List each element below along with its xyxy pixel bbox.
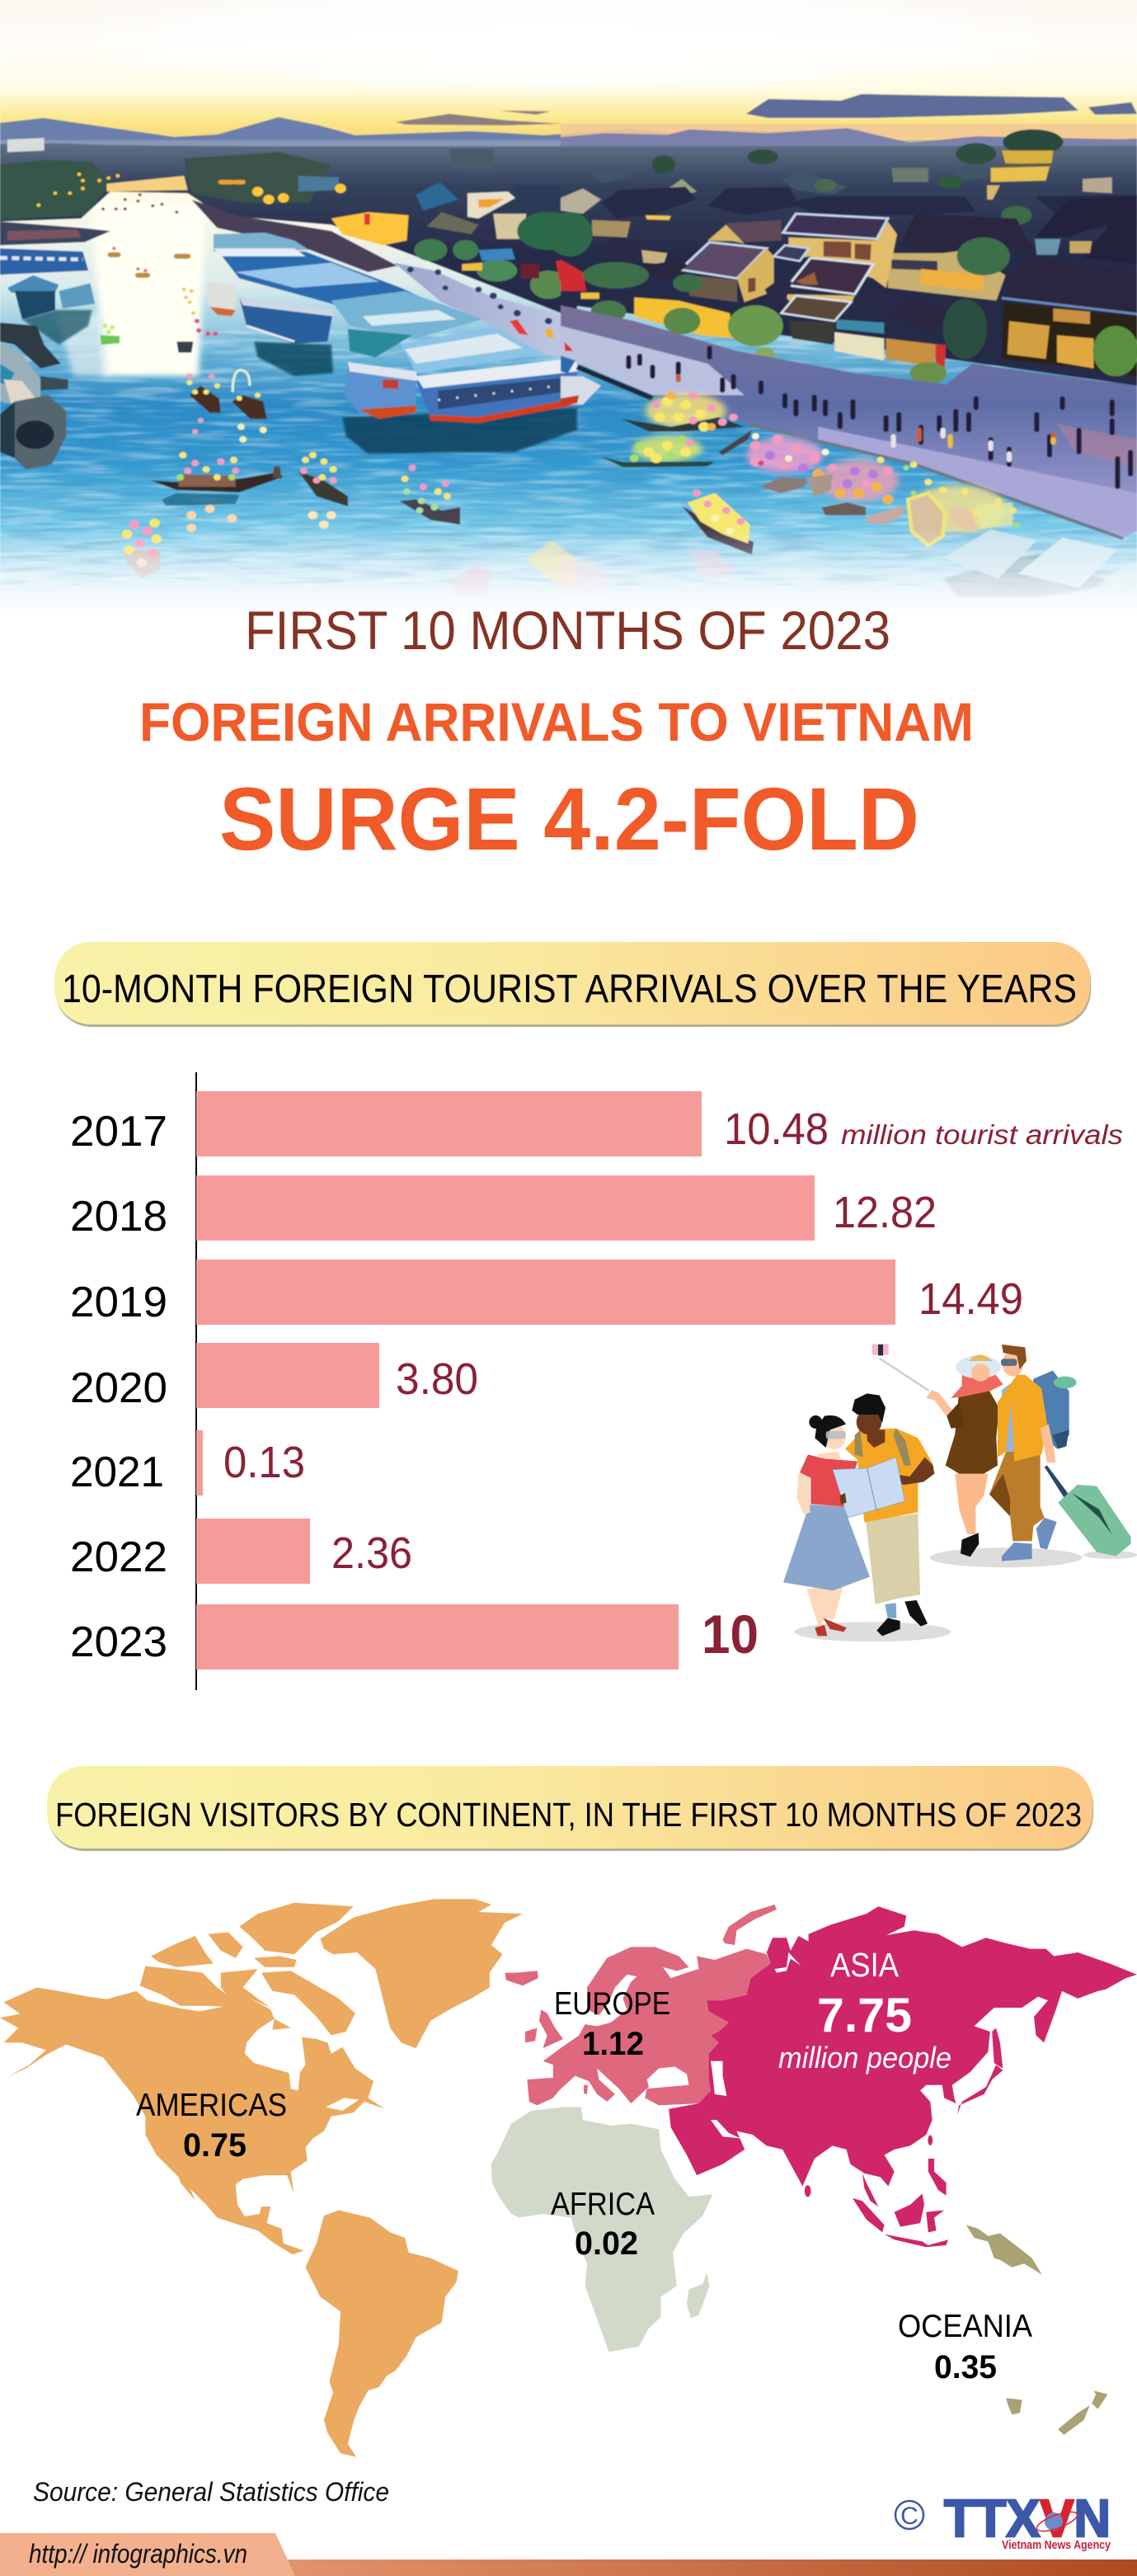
bar 2018 [70, 1175, 937, 1241]
bar 2022 [70, 1519, 412, 1584]
label: Europe [554, 1986, 670, 2062]
right half of photo [547, 124, 1137, 597]
bank crowd strip [191, 200, 397, 272]
label: Oceania: OCEANIA [898, 2309, 1032, 2344]
trees near bank [414, 212, 580, 299]
label: Africa [551, 2187, 655, 2262]
river water with ripples [0, 190, 1137, 627]
selfie couple [872, 1344, 1131, 1561]
label: Oceania: 0.35 [934, 2349, 997, 2385]
logo: TTXVN Vietnam News Agency: C [900, 2503, 919, 2530]
bar 2017 [70, 1091, 1123, 1156]
people on bank [407, 266, 573, 324]
heading: first 10 months of 2023: FIRST 10 MONTHS OF 2023 [245, 600, 890, 661]
map: Asia [669, 1906, 1137, 2247]
heading: surge 4.2-fold: SURGE 4.2-FOLD [219, 769, 919, 869]
bar 2023: 2023 [70, 1618, 167, 1666]
photo: Hoi An riverside at dusk [0, 0, 1137, 631]
crowd [628, 348, 1130, 487]
label: Asia: ASIA [830, 1946, 900, 1984]
section banner: visitors by continent [47, 1766, 1093, 1851]
label: Asia: 7.75 [817, 1989, 912, 2042]
map: Americas [0, 1899, 538, 2457]
lantern boat: twin boats mid river [190, 386, 221, 412]
logo: TTXVN Vietnam News Agency: Vietnam News Agency [1002, 2538, 1111, 2552]
bar 2017: million tourist arrivals [841, 1119, 1123, 1150]
bar 2023 [70, 1604, 759, 1669]
label: Americas [136, 2088, 287, 2164]
trees [547, 212, 1137, 407]
label: Asia: million people [778, 2041, 951, 2074]
houses [561, 196, 1137, 376]
footer bar [0, 2533, 1137, 2576]
bar 2020: 2020 [70, 1364, 167, 1412]
bar 2019: 14.49 [919, 1274, 1023, 1324]
bar 2021: 2021 [70, 1448, 164, 1496]
far town [0, 144, 577, 319]
bar 2022: 2.36 [331, 1528, 412, 1578]
small far boats [103, 195, 188, 275]
roof field [561, 146, 1137, 386]
label: Africa: AFRICA [551, 2187, 655, 2222]
bar 2021 [70, 1430, 305, 1496]
map: Oceania [966, 2225, 1108, 2435]
map: Europe [525, 1905, 777, 2105]
boat with green lanterns [399, 499, 460, 525]
lantern clusters [622, 417, 745, 431]
bar 2020: 3.80 [396, 1354, 478, 1404]
label: Europe: 1.12 [582, 2026, 644, 2062]
label: Asia [778, 1946, 951, 2074]
label: Americas: AMERICAS [136, 2088, 287, 2123]
bar 2021: 0.13 [223, 1438, 305, 1487]
label: Europe: EUROPE [554, 1986, 670, 2022]
map: Africa [491, 2107, 712, 2352]
round lantern boat [298, 471, 348, 506]
boats in front [759, 478, 807, 493]
bar 2018: 12.82 [833, 1188, 937, 1237]
source note: Source: General Statistics Office [33, 2477, 389, 2507]
fade to white [0, 528, 1137, 631]
bar 2017: 10.48 [724, 1104, 829, 1154]
bar 2018: 2018 [70, 1193, 167, 1241]
upper right lit building [1003, 130, 1063, 155]
promenade left part [394, 262, 577, 360]
left half of photo [0, 138, 580, 597]
section banner: arrivals over the years [54, 942, 1091, 1027]
bar 2020 [70, 1343, 478, 1412]
label: Americas: 0.75 [183, 2127, 247, 2164]
bar 2019: 2019 [70, 1279, 167, 1326]
bar chart: 10-month arrivals by year [70, 1072, 1123, 1690]
moored boats left [0, 222, 110, 245]
bar 2022: 2022 [70, 1533, 167, 1581]
label: Africa: 0.02 [575, 2225, 638, 2262]
heading: foreign arrivals to Vietnam: FOREIGN ARRIVALS TO VIETNAM [139, 691, 974, 752]
label: Oceania [898, 2309, 1032, 2385]
bar 2023: 10 [702, 1604, 759, 1665]
bar 2017: 2017 [70, 1108, 167, 1156]
bar 2019 [70, 1260, 1023, 1326]
warm lights on left bank [39, 174, 341, 205]
front lantern boat [682, 506, 754, 554]
end of docked boat [561, 376, 601, 405]
pale lantern boat lower left [125, 550, 160, 578]
covered boats at bottom right [943, 530, 1036, 578]
map couple [783, 1393, 934, 1636]
lantern glow [632, 393, 1005, 533]
promenade [561, 305, 1137, 538]
docked tourist boats [214, 233, 309, 252]
long boat with lanterns [151, 473, 284, 492]
footer bar: http:// infographics.vn [29, 2539, 247, 2569]
illustration: tourists with map and selfie stick [783, 1344, 1137, 1641]
logo: TTXVN Vietnam News Agency: TTXVN [944, 2489, 1111, 2548]
